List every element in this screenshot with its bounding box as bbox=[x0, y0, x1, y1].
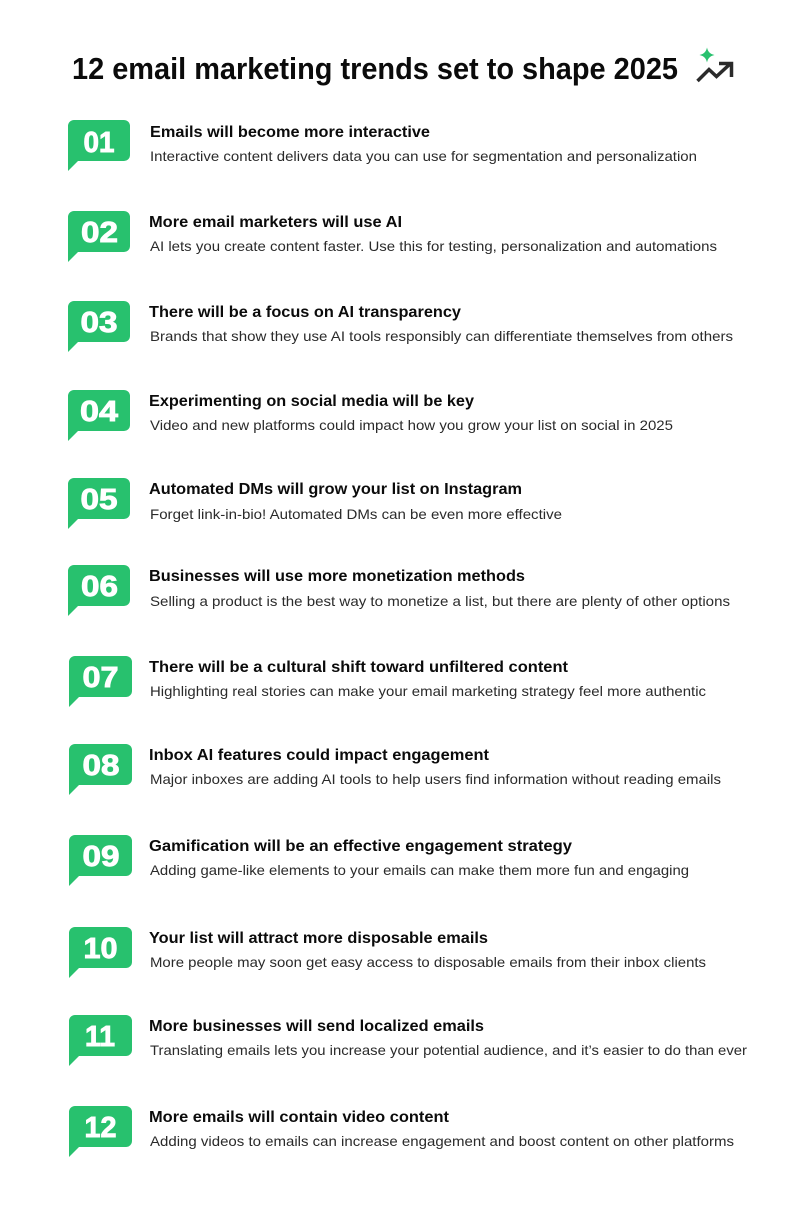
heading 12: More emails will contain video content bbox=[149, 1109, 450, 1126]
icon: trend arrow with sparkle bbox=[698, 48, 732, 81]
trend 10 bbox=[69, 927, 706, 978]
description 08: Major inboxes are adding AI tools to help users find information without reading emails bbox=[150, 771, 721, 787]
description 03: Brands that show they use AI tools responsibly can differentiate themselves from others bbox=[150, 328, 733, 344]
badge 01 bbox=[68, 120, 130, 171]
trend 01 bbox=[68, 120, 697, 171]
heading 02: More email marketers will use AI bbox=[149, 214, 402, 231]
description 05: Forget link-in-bio! Automated DMs can be even more effective bbox=[150, 506, 562, 522]
badge 12: 12 bbox=[84, 1112, 116, 1144]
heading 04: Experimenting on social media will be key bbox=[149, 393, 474, 410]
heading 03: There will be a focus on AI transparency bbox=[149, 304, 461, 321]
heading 11: More businesses will send localized emails bbox=[149, 1018, 484, 1035]
badge 11 bbox=[69, 1015, 132, 1066]
description 06: Selling a product is the best way to monetize a list, but there are plenty of other options bbox=[150, 593, 730, 609]
description 12: Adding videos to emails can increase engagement and boost content on other platforms bbox=[150, 1133, 734, 1149]
heading 05: Automated DMs will grow your list on Instagram bbox=[149, 481, 522, 498]
description 02: AI lets you create content faster. Use this for testing, personalization and automations bbox=[150, 238, 717, 254]
badge 05: 05 bbox=[80, 484, 118, 516]
heading 01: Emails will become more interactive bbox=[150, 124, 430, 141]
heading 06: Businesses will use more monetization methods bbox=[149, 568, 525, 585]
badge 01: 01 bbox=[84, 127, 114, 159]
badge 05 bbox=[68, 478, 130, 529]
title: 12 email marketing trends set to shape 2025 bbox=[72, 51, 678, 86]
badge 06 bbox=[68, 565, 130, 616]
description 11: Translating emails lets you increase your potential audience, and it’s easier to do than ever bbox=[150, 1042, 747, 1058]
badge 07: 07 bbox=[82, 662, 118, 694]
trend 03 bbox=[68, 301, 733, 352]
badge 02: 02 bbox=[81, 217, 118, 249]
badge 07 bbox=[69, 656, 132, 707]
description 07: Highlighting real stories can make your email marketing strategy feel more authentic bbox=[150, 683, 706, 699]
trend 12 bbox=[69, 1106, 734, 1157]
trend 08 bbox=[69, 744, 721, 795]
badge 06: 06 bbox=[81, 571, 118, 603]
badge 08 bbox=[69, 744, 132, 795]
badge 09: 09 bbox=[82, 841, 120, 873]
trend 06 bbox=[68, 565, 730, 616]
heading 10: Your list will attract more disposable emails bbox=[149, 930, 488, 947]
badge 03 bbox=[68, 301, 130, 352]
trend 09 bbox=[69, 835, 689, 886]
badge 10: 10 bbox=[84, 933, 118, 965]
badge 08: 08 bbox=[82, 750, 120, 782]
description 04: Video and new platforms could impact how you grow your list on social in 2025 bbox=[150, 417, 673, 433]
badge 10 bbox=[69, 927, 132, 978]
trend 07 bbox=[69, 656, 706, 707]
badge 03: 03 bbox=[80, 307, 118, 339]
trend 02 bbox=[68, 211, 717, 262]
description 10: More people may soon get easy access to disposable emails from their inbox clients bbox=[150, 954, 706, 970]
badge 12 bbox=[69, 1106, 132, 1157]
heading 07: There will be a cultural shift toward unfiltered content bbox=[149, 659, 569, 676]
badge 04: 04 bbox=[80, 396, 118, 428]
trend 05 bbox=[68, 478, 562, 529]
badge 11: 11 bbox=[85, 1021, 115, 1053]
heading 09: Gamification will be an effective engagement strategy bbox=[149, 838, 572, 855]
description 01: Interactive content delivers data you can use for segmentation and personalization bbox=[150, 148, 697, 164]
description 09: Adding game-like elements to your emails can make them more fun and engaging bbox=[150, 862, 689, 878]
trend 11 bbox=[69, 1015, 747, 1066]
badge 04 bbox=[68, 390, 130, 441]
badge 09 bbox=[69, 835, 132, 886]
heading 08: Inbox AI features could impact engagement bbox=[149, 747, 490, 764]
trend 04 bbox=[68, 390, 673, 441]
badge 02 bbox=[68, 211, 130, 262]
